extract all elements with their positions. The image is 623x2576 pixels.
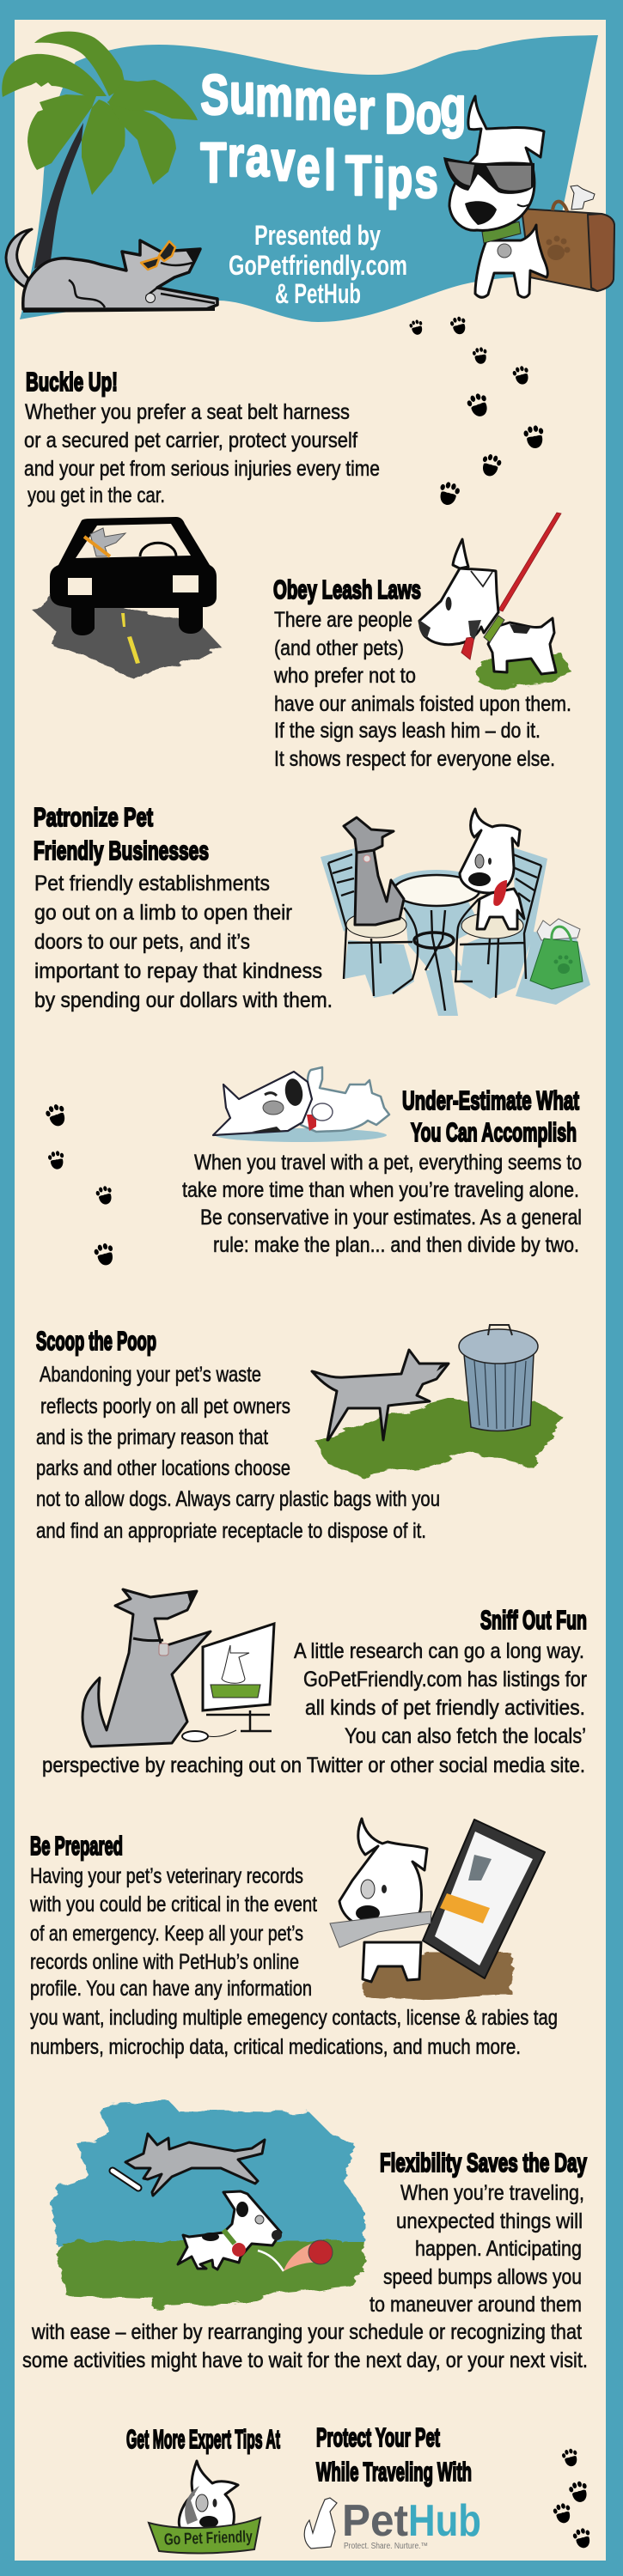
presented by [229, 220, 407, 309]
text block: Having your pet’s veterinary records [30, 1864, 303, 1888]
text block: parks and other locations choose [36, 1456, 290, 1480]
text block [273, 608, 571, 771]
suitcase [522, 209, 614, 291]
presented by: Presented by [254, 220, 381, 251]
icon: white dog with sunglasses and suitcase [443, 96, 614, 297]
text block [182, 1151, 582, 1257]
heading: Obey Leash Laws [273, 574, 421, 605]
heading [34, 802, 209, 866]
text block: Abandoning your pet’s waste [40, 1363, 261, 1387]
dog head [449, 96, 544, 230]
icon: grey dog using computer [82, 1589, 274, 1747]
title [200, 63, 466, 210]
text block: Pet friendly establishments [34, 872, 270, 896]
panel: under-estimate what you can accomplish [182, 1067, 582, 1257]
heading: Buckle Up! [26, 367, 118, 397]
panel: be prepared [29, 1819, 558, 2059]
text block: important to repay that kindness [34, 959, 322, 983]
text block: It shows respect for everyone else. [274, 747, 555, 771]
panel: sniff out fun [42, 1589, 587, 1777]
icon: dogs at cafe table with green bag [321, 809, 590, 1016]
text block: and is the primary reason that [36, 1425, 268, 1449]
paw prints trail [437, 346, 546, 507]
text block [29, 1864, 558, 2059]
text block [24, 400, 380, 507]
wavy teal flag [20, 35, 598, 322]
text block [42, 1639, 587, 1777]
text block: records online with PetHub’s online [30, 1950, 299, 1974]
footer: go pet friendly [126, 2424, 280, 2553]
dog body [475, 225, 547, 297]
icon: dog by trash can on grass [312, 1325, 563, 1477]
heading: Get More Expert Tips At [126, 2424, 280, 2454]
text block: with you could be critical in the event [29, 1893, 317, 1917]
text block: happen. Anticipating [415, 2237, 582, 2261]
text block [34, 872, 333, 1012]
icon: dog lying on its back [213, 1067, 389, 1142]
logo: pethub: Pet [342, 2496, 408, 2546]
icon: white dog on red leash [418, 513, 570, 689]
presented by: & PetHub [275, 278, 361, 309]
icon: dog holding newspaper with phone [330, 1819, 545, 2000]
title: Summer Dog [200, 63, 466, 146]
text block: profile. You can have any information [30, 1977, 312, 2001]
icon: palm tree [2, 32, 198, 269]
heading: Protect Your Pet [316, 2422, 440, 2452]
title: Travel Tips [200, 125, 438, 210]
paw prints near header [408, 315, 468, 337]
text block: numbers, microchip data, critical medications, and much more. [30, 2035, 521, 2059]
presented by: GoPetfriendly.com [229, 250, 407, 281]
heading: While Traveling With [316, 2457, 472, 2487]
footer: pethub [304, 2422, 481, 2551]
logo: go pet friendly: Go Pet Friendly [164, 2528, 253, 2549]
heading: Scoop the Poop [36, 1326, 156, 1356]
text block: who prefer not to [273, 664, 416, 688]
text block [22, 2181, 588, 2372]
text block: If the sign says leash him – do it. [274, 719, 541, 743]
text block: all kinds of pet friendly activities. [305, 1696, 585, 1720]
icon: jumping dogs, blue sky and grass [52, 2101, 365, 2307]
panel: flexibility saves the day [22, 2101, 588, 2372]
logo: pethub [304, 2496, 481, 2551]
heading [316, 2422, 472, 2487]
text block: and find an appropriate receptacle to dispose of it. [36, 1519, 426, 1543]
text block: you get in the car. [27, 483, 165, 507]
text block: not to allow dogs. Always carry plastic bags with you [36, 1487, 440, 1511]
paw prints left [44, 1103, 117, 1267]
logo: pethub: Hub [408, 2496, 481, 2546]
text block: unexpected things will [396, 2209, 583, 2233]
heading [402, 1085, 579, 1147]
text block: You can also fetch the locals’ [345, 1724, 586, 1748]
panel: patronize pet friendly businesses [34, 802, 590, 1016]
header banner [2, 32, 614, 337]
text block: A little research can go a long way. [294, 1639, 584, 1663]
text block: go out on a limb to open their [34, 901, 292, 925]
text block: of an emergency. Keep all your pet’s [30, 1922, 303, 1946]
heading: Friendly Businesses [34, 835, 209, 866]
heading: Patronize Pet [34, 802, 153, 832]
text block: Whether you prefer a seat belt harness [25, 400, 350, 424]
paw prints bottom right [552, 2447, 593, 2550]
text block: There are people [274, 608, 412, 632]
text block: or a secured pet carrier, protect yourself [24, 428, 357, 453]
text block: speed bumps allows you [383, 2265, 582, 2289]
text block: doors to our pets, and it’s [34, 930, 250, 954]
text block: and your pet from serious injuries every time [24, 457, 380, 481]
text block: When you’re traveling, [400, 2181, 584, 2205]
panel: scoop the poop [36, 1325, 563, 1543]
text block: (and other pets) [274, 636, 404, 660]
text block: by spending our dollars with them. [34, 988, 333, 1012]
panel: buckle up [24, 367, 380, 677]
icon: car on road [32, 517, 221, 677]
text block [36, 1363, 440, 1543]
text block: GoPetFriendly.com has listings for [303, 1668, 587, 1692]
heading: Be Prepared [30, 1831, 123, 1861]
text block: to maneuver around them [370, 2293, 582, 2317]
logo: pethub: Protect. Share. Nurture.™ [344, 2542, 428, 2551]
panel: obey leash laws [273, 513, 571, 771]
text block: reflects poorly on all pet owners [40, 1394, 290, 1419]
text block: have our animals foisted upon them. [274, 692, 571, 716]
logo: go pet friendly [149, 2461, 260, 2553]
icon: grey dog with orange sunglasses [6, 229, 217, 311]
